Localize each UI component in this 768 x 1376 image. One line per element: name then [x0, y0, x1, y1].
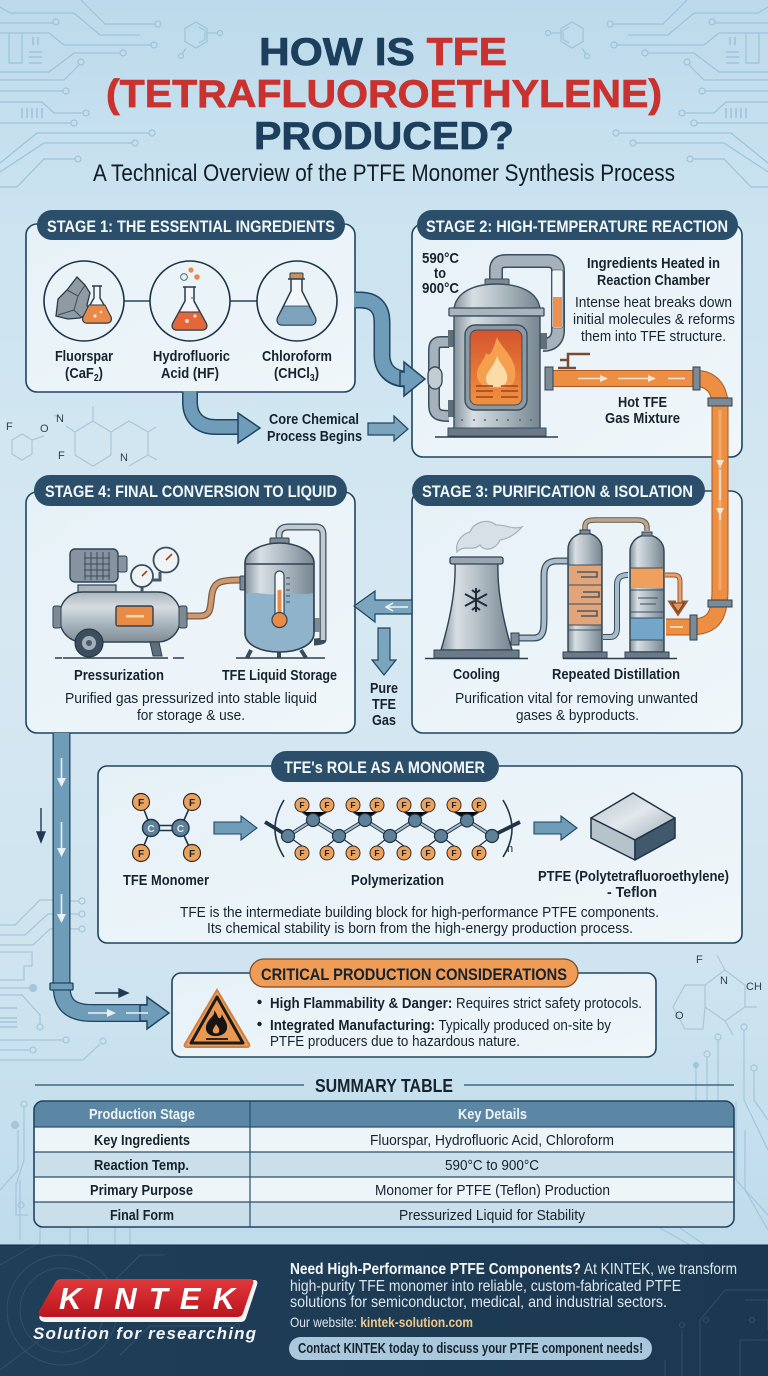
row: primary purpose: [90, 1183, 610, 1199]
diagram: polymer chain: F: [425, 848, 431, 858]
logo tagline: Solution for researching: [33, 1324, 257, 1343]
panel: stage 4 conversion: [26, 475, 355, 733]
diagram: polymer chain: F: [425, 800, 431, 810]
heading: monomer role: TFE's ROLE AS A MONOMER: [284, 758, 485, 777]
panel: critical considerations: [172, 959, 656, 1057]
text: intense heat: initial molecules & reforms: [573, 311, 735, 328]
icon: reactor vessel: [434, 261, 563, 437]
text: consideration 1: High Flammability & Danger: Requires strict safety protocols.: [270, 996, 642, 1012]
text: website: Our website: kintek-solution.com: [290, 1314, 473, 1330]
flame: [477, 337, 515, 388]
text: intense heat: them into TFE structure.: [581, 328, 726, 345]
label: fluorspar: Fluorspar: [55, 348, 113, 365]
diagram: polymer chain: F: [476, 848, 482, 858]
arrow: pure gas down: [372, 628, 396, 675]
row: final form: [110, 1208, 586, 1224]
label: fluorspar: 2: [94, 373, 99, 384]
title: PRODUCED?: [254, 115, 514, 158]
diagram: polymer chain: F: [401, 848, 407, 858]
background molecule left: N: [120, 452, 128, 464]
diagram: polymer chain: F: [350, 800, 356, 810]
background circuit pattern lower: [0, 898, 768, 1245]
text: consideration 2: PTFE producers due to hazardous nature.: [270, 1034, 520, 1050]
diagram: TFE monomer: C: [147, 824, 155, 835]
label: chloroform: ): [315, 365, 319, 382]
logo: KINTEK: [39, 1279, 257, 1322]
label: core chemical process: Core Chemical: [269, 412, 359, 428]
icon: distillation columns: [563, 520, 684, 658]
arrow: monomer to polymer: [214, 816, 257, 840]
label: pressurization: Pressurization: [74, 667, 164, 684]
label: chloroform: Chloroform: [262, 348, 332, 365]
button: contact: [289, 1337, 652, 1360]
diagram: polymer chain: F: [324, 848, 330, 858]
text: call to action: high-purity TFE monomer into reliable, custom-fabricated PTFE: [290, 1278, 681, 1295]
text: stage 4 description: Purified gas pressurized into stable liquid: [65, 690, 317, 707]
heading: stage 4: [34, 475, 347, 506]
background molecule left: F: [58, 450, 65, 462]
heading: critical considerations: CRITICAL PRODUCTION CONSIDERATIONS: [261, 965, 567, 984]
heading: stage 4: STAGE 4: FINAL CONVERSION TO LIQUID: [45, 482, 337, 501]
label: liquid storage: TFE Liquid Storage: [222, 667, 337, 684]
heading: stage 1: STAGE 1: THE ESSENTIAL INGREDIENTS: [47, 217, 335, 236]
diagram: polymer chain: F: [451, 848, 457, 858]
label: chloroform: [262, 348, 332, 384]
diagram: TFE monomer: F: [138, 798, 144, 809]
row: reaction temp: [94, 1158, 539, 1174]
icon: compressor: [53, 548, 240, 658]
diagram: polymer chain: F: [299, 800, 305, 810]
label: hydrofluoric acid: [153, 348, 230, 382]
label: chloroform: 3: [310, 373, 315, 384]
text: stage 3 description: gases & byproducts.: [516, 707, 639, 724]
label: hot gas: Hot TFE: [618, 394, 667, 411]
icon: flammable warning: [185, 990, 249, 1047]
label: pure TFE gas: Pure: [370, 680, 398, 697]
label: hydrofluoric acid: Acid (HF): [161, 365, 219, 382]
row: final form: Final Form: [110, 1208, 174, 1224]
summary table: [34, 1101, 734, 1227]
diagram: polymer chain: F: [350, 848, 356, 858]
heading: monomer role: [271, 751, 499, 782]
panel: stage 1 ingredients: [26, 210, 355, 392]
row: reaction temp: Reaction Temp.: [94, 1158, 189, 1174]
icon: cooling tower: [425, 521, 568, 658]
label: cooling: Cooling: [453, 666, 500, 683]
icon: chloroform flask: [257, 261, 337, 341]
text: stage 3 description: [455, 690, 698, 724]
row: primary purpose: Primary Purpose: [90, 1183, 193, 1199]
background molecule right: [673, 954, 762, 1035]
pipe: hot TFE orange pipe: [545, 354, 732, 640]
diagram: TFE monomer: C: [177, 824, 184, 835]
arrow: stage 4 pipe to considerations: [50, 733, 169, 1029]
arrow: polymer to PTFE: [534, 816, 577, 840]
label: temperature: 590°C: [422, 250, 459, 267]
text: monomer description: [180, 904, 659, 937]
label: core chemical process: Process Begins: [267, 429, 362, 445]
label: pure TFE gas: TFE: [372, 696, 396, 713]
heading: critical considerations: [250, 959, 578, 987]
heading: stage 1: [37, 210, 345, 240]
subtitle: A Technical Overview of the PTFE Monomer Synthesis Process: [93, 160, 675, 187]
heading: stage 3: STAGE 3: PURIFICATION & ISOLATION: [422, 482, 693, 501]
label: temperature: 900°C: [422, 280, 459, 297]
label: fluorspar: [55, 348, 113, 384]
arrow: core process: [190, 391, 260, 443]
background circuit pattern left: [0, 0, 222, 187]
label: pure TFE gas: Gas: [372, 712, 396, 729]
footer banner: [0, 1245, 768, 1376]
icon: fluorspar rock and flask: [44, 261, 124, 341]
diagram: TFE monomer: F: [138, 849, 144, 860]
diagram: polymer chain: F: [401, 800, 407, 810]
background molecule left: O: [40, 423, 49, 435]
label: fluorspar: (CaF: [65, 365, 98, 382]
label: TFE monomer: TFE Monomer: [123, 872, 209, 889]
diagram: polymer chain: F: [324, 800, 330, 810]
label: temperature: to: [434, 265, 446, 282]
text: call to action: [290, 1261, 737, 1311]
heading: ingredients heated: Reaction Chamber: [597, 272, 710, 289]
arrow: ingredients to reactor: [354, 300, 442, 396]
background molecule right: F: [696, 954, 703, 966]
diagram: polymer chain: F: [299, 848, 305, 858]
label: hot gas: [605, 394, 680, 427]
background molecule left: F: [6, 421, 13, 433]
table header: [89, 1107, 527, 1123]
label: fluorspar: ): [99, 365, 103, 382]
icon: liquid storage tank: [236, 527, 325, 658]
button: contact: Contact KINTEK today to discuss your PTFE component needs!: [298, 1341, 643, 1357]
logo: KINTEK: KINTEK: [59, 1281, 238, 1316]
label: PTFE Teflon: [538, 868, 729, 901]
label: repeated distillation: Repeated Distillation: [552, 666, 680, 683]
title: (TETRAFLUOROETHYLENE): [106, 73, 662, 116]
text: consideration 2: [257, 1018, 612, 1050]
label: hot gas: Gas Mixture: [605, 410, 680, 427]
diagram: polymer chain: F: [476, 800, 482, 810]
row: final form: Pressurized Liquid for Stability: [399, 1208, 586, 1224]
diagram: polymer chain: [265, 798, 520, 860]
diagram: polymer chain: F: [374, 848, 380, 858]
text: intense heat: [573, 294, 735, 345]
row: reaction temp: 590°C to 900°C: [445, 1158, 539, 1174]
row: key ingredients: [94, 1133, 614, 1149]
heading: ingredients heated: [587, 255, 720, 289]
panel: TFE monomer role: [98, 751, 742, 943]
heading: summary table: SUMMARY TABLE: [315, 1076, 453, 1096]
arrow: thin right: [95, 989, 128, 997]
title: HOW IS TFE: [259, 31, 507, 74]
diagram: polymer chain: F: [374, 800, 380, 810]
background molecule left: [6, 406, 157, 466]
text: monomer description: TFE is the intermediate building block for high-performance PTFE components.: [180, 904, 659, 921]
label: chloroform: (CHCl: [274, 365, 316, 382]
row: primary purpose: Monomer for PTFE (Teflon) Production: [375, 1183, 610, 1199]
text: call to action: solutions for semiconductor, medical, and industrial sectors.: [290, 1294, 667, 1311]
text: stage 4 description: for storage & use.: [137, 707, 245, 724]
label: core chemical process: [267, 412, 362, 445]
text: stage 4 description: [65, 690, 317, 724]
arrow: thin down: [37, 808, 45, 842]
label: PTFE Teflon: - Teflon: [607, 884, 657, 901]
background molecule right: O: [675, 1010, 684, 1022]
heading: stage 2: STAGE 2: HIGH-TEMPERATURE REACTION: [426, 217, 728, 236]
background molecule right: CH: [746, 981, 762, 993]
background molecule left: N: [56, 413, 64, 425]
row: key ingredients: Key Ingredients: [94, 1133, 190, 1149]
arrow: small to reactor: [368, 416, 408, 441]
heading: stage 3: [412, 475, 705, 506]
label: hydrofluoric acid: Hydrofluoric: [153, 348, 230, 365]
table header: Production Stage: [89, 1107, 195, 1123]
heading: ingredients heated: Ingredients Heated in: [587, 255, 720, 272]
background circuit pattern right: [546, 0, 768, 187]
text: stage 3 description: Purification vital for removing unwanted: [455, 690, 698, 707]
diagram: polymer chain: F: [451, 800, 457, 810]
panel: stage 2 reaction: [412, 210, 742, 457]
icon: hydrofluoric acid flask: [150, 261, 230, 341]
background molecule right: N: [720, 975, 728, 987]
row: key ingredients: Fluorspar, Hydrofluoric Acid, Chloroform: [370, 1133, 614, 1149]
label: temperature: [422, 250, 459, 297]
diagram: TFE monomer: F: [189, 798, 195, 809]
heading: stage 2: [417, 210, 738, 240]
title: [106, 31, 662, 158]
label: polymerization: Polymerization: [351, 872, 444, 889]
text: intense heat: Intense heat breaks down: [575, 294, 732, 311]
diagram: TFE monomer: [132, 794, 200, 862]
icon: PTFE block: [591, 793, 675, 860]
diagram: TFE monomer: F: [189, 849, 195, 860]
text: consideration 2: Integrated Manufacturing: Typically produced on-site by: [270, 1018, 612, 1034]
text: call to action: Need High-Performance PTFE Components? At KINTEK, we transform: [290, 1261, 737, 1278]
table header: Key Details: [458, 1107, 527, 1123]
arrow: stage 3 to stage 4: [354, 591, 412, 622]
label: pure TFE gas: [370, 680, 398, 729]
gauges: [142, 572, 160, 592]
text: monomer description: Its chemical stability is born from the high-energy production process.: [207, 920, 633, 937]
diagram: polymer chain: n: [507, 843, 513, 855]
panel: stage 3 purification: [412, 475, 742, 733]
label: PTFE Teflon: PTFE (Polytetrafluoroethylene): [538, 868, 729, 885]
